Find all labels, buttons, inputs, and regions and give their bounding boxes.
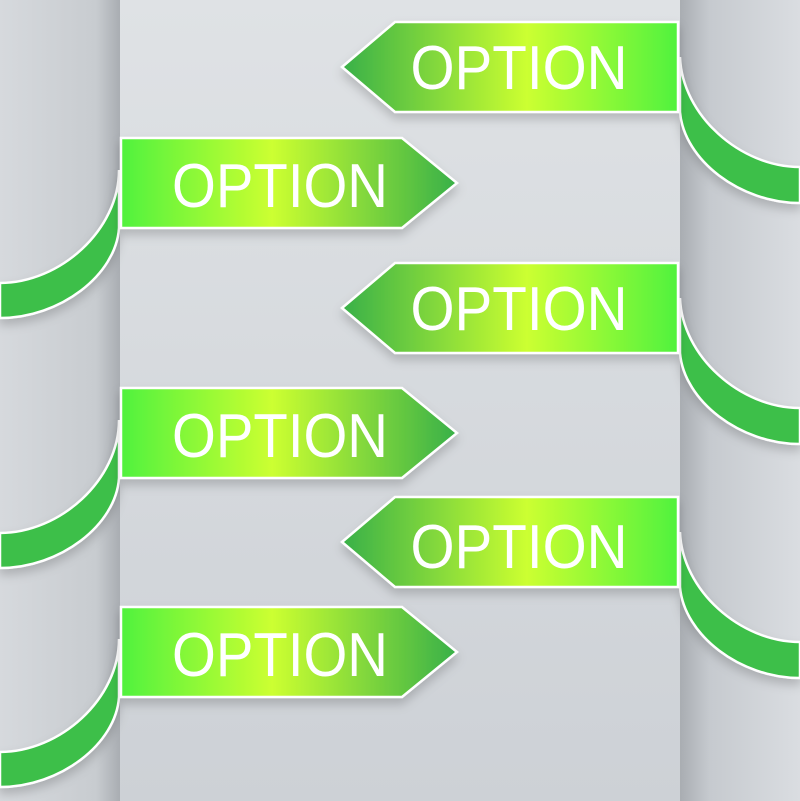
curl: right 1: [680, 57, 800, 203]
arrow 4 (right-pointing): OPTION: [172, 402, 388, 471]
arrow 6 (right-pointing): [121, 607, 457, 697]
arrow 6 (right-pointing): OPTION: [172, 621, 388, 690]
arrow 4 (right-pointing): [121, 388, 457, 478]
arrow 3 (left-pointing): OPTION: [410, 275, 628, 344]
curl: right 3: [680, 532, 800, 678]
arrow 3 (left-pointing): [342, 263, 678, 353]
curl: left 1: [0, 170, 119, 318]
left column: [0, 0, 120, 801]
curl: left 2: [0, 420, 119, 568]
arrow 1 (left-pointing): OPTION: [410, 34, 628, 103]
arrow 2 (right-pointing): OPTION: [172, 152, 388, 221]
right column: [680, 0, 800, 801]
arrow 1 (left-pointing): [342, 22, 678, 112]
arrow 2 (right-pointing): [121, 138, 457, 228]
arrow 5 (left-pointing): [342, 497, 678, 587]
arrow 5 (left-pointing): OPTION: [410, 513, 628, 582]
curl: right 2: [680, 298, 800, 444]
curl: left 3: [0, 639, 119, 787]
